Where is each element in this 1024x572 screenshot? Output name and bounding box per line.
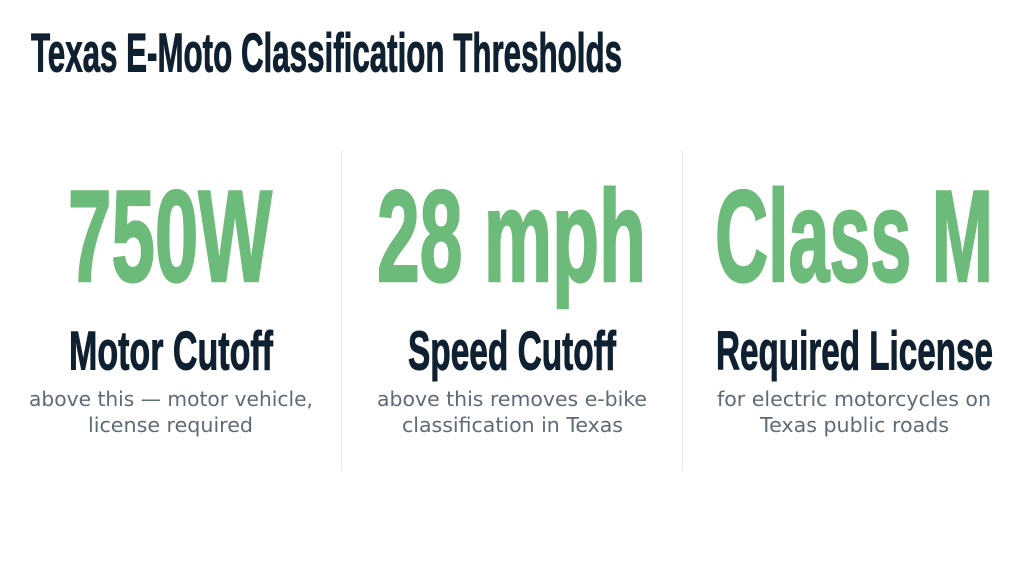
big number: 750W: 750W [68, 163, 272, 309]
description: required license [717, 387, 991, 437]
description: speed cutoff: above this removes e-bike [377, 387, 647, 411]
description: required license: Texas public roads [759, 413, 949, 437]
panel: required license [715, 163, 993, 437]
description: motor cutoff [29, 387, 313, 437]
description: required license: for electric motorcycles on [717, 387, 991, 411]
big number: 28 mph: 28 mph [377, 163, 646, 309]
panel: motor cutoff [29, 163, 313, 437]
description: speed cutoff: classification in Texas [402, 413, 623, 437]
heading: Speed Cutoff: Speed Cutoff [408, 320, 616, 382]
heading: Motor Cutoff: Motor Cutoff [69, 320, 273, 382]
description: motor cutoff: license required [88, 413, 253, 437]
description: motor cutoff: above this — motor vehicle, [29, 387, 313, 411]
panel: speed cutoff [377, 163, 647, 437]
description: speed cutoff [377, 387, 647, 437]
